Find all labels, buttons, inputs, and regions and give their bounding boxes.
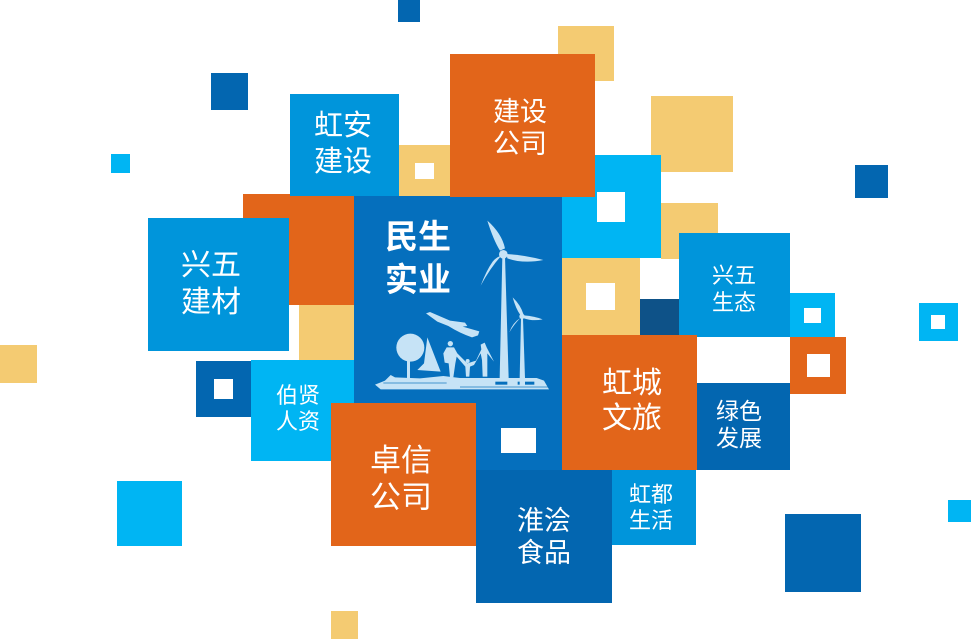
- icon: tree: [396, 334, 424, 380]
- square: yellow far left: [0, 345, 37, 383]
- panel: 淮浍食品: 淮浍: [517, 506, 571, 536]
- panel: 建设公司: 建设: [493, 97, 547, 127]
- panel: 兴五生态: 生态: [712, 290, 756, 315]
- heading: 民生实业: [385, 218, 451, 298]
- panel: 伯贤人资: 人资: [276, 409, 320, 434]
- panel: 虹安建设: 虹安: [314, 110, 372, 142]
- panel: 虹安建设: [290, 94, 399, 196]
- panel: 绿色发展: 发展: [716, 425, 762, 451]
- panel: 虹城文旅: [562, 335, 697, 470]
- square: navy: [640, 299, 679, 335]
- panel: 虹城文旅: 文旅: [602, 402, 662, 435]
- square: small cyan right edge: [948, 500, 971, 522]
- icon: large wind turbine: [481, 221, 543, 378]
- square: top yellow: [558, 26, 614, 81]
- square: upper right yellow: [651, 96, 733, 172]
- square: bottom yellow: [331, 611, 358, 639]
- panel: 虹都生活: 虹都: [629, 482, 673, 507]
- panel: 兴五生态: [679, 233, 790, 337]
- panel: 淮浍食品: 食品: [517, 538, 571, 568]
- heading: 民生实业: 民生: [385, 218, 451, 255]
- square: cyan lower left: [117, 481, 182, 546]
- icon: airplane: [426, 312, 479, 337]
- panel: 建设公司: 公司: [493, 129, 547, 159]
- square: yellow beside cyan: [661, 203, 718, 259]
- panel: 绿色发展: [697, 383, 790, 470]
- panel: 淮浍食品: [476, 470, 612, 603]
- square: yellow below orange: [299, 305, 354, 360]
- panel: 兴五建材: 兴五: [181, 249, 241, 282]
- panel: 虹都生活: [612, 470, 696, 545]
- panel: 绿色发展: 绿色: [716, 398, 762, 424]
- square: top dark blue: [398, 0, 420, 22]
- square: orange behind 兴五建材: [243, 194, 354, 305]
- square: cyan with white center right of 兴五生态: [790, 293, 835, 337]
- illustration: wind turbines, plane, family and landscape: [375, 220, 549, 390]
- icon: small wind turbine: [509, 297, 543, 378]
- square: dark blue with white center: [196, 361, 251, 417]
- panel: 建设公司: [450, 54, 595, 197]
- panel: 伯贤人资: 伯贤: [276, 383, 320, 408]
- square: upper left dark blue: [211, 73, 248, 110]
- panel: 虹城文旅: 虹城: [602, 367, 662, 400]
- icon: ground: [375, 375, 549, 389]
- square: dark blue lower right: [785, 514, 861, 592]
- icon: sailboat: [417, 337, 441, 372]
- panel: 卓信公司: [331, 403, 476, 546]
- panel: 卓信公司: 卓信: [370, 443, 432, 478]
- square: white window in center panel: [501, 428, 536, 453]
- panel: 虹都生活: 生活: [629, 508, 673, 533]
- icon: family: [443, 341, 494, 377]
- square: yellow with white center beside 虹安建设: [399, 145, 450, 196]
- square: dark blue right: [855, 165, 888, 198]
- square: cyan with white center: [562, 155, 661, 258]
- square: orange with white center: [790, 337, 846, 394]
- panel: 兴五生态: 兴五: [712, 263, 756, 288]
- square: cyan far right with white center: [919, 303, 958, 341]
- panel: 民生实业 center: [354, 196, 562, 470]
- panel: 伯贤人资: [251, 360, 354, 461]
- square: yellow with white center middle right: [562, 258, 640, 335]
- panel: 兴五建材: 建材: [181, 286, 241, 319]
- panel: 卓信公司: 公司: [370, 480, 432, 515]
- square: small cyan left: [111, 154, 130, 173]
- panel: 虹安建设: 建设: [314, 146, 372, 178]
- panel: 兴五建材: [148, 218, 289, 351]
- heading: 民生实业: 实业: [385, 261, 451, 298]
